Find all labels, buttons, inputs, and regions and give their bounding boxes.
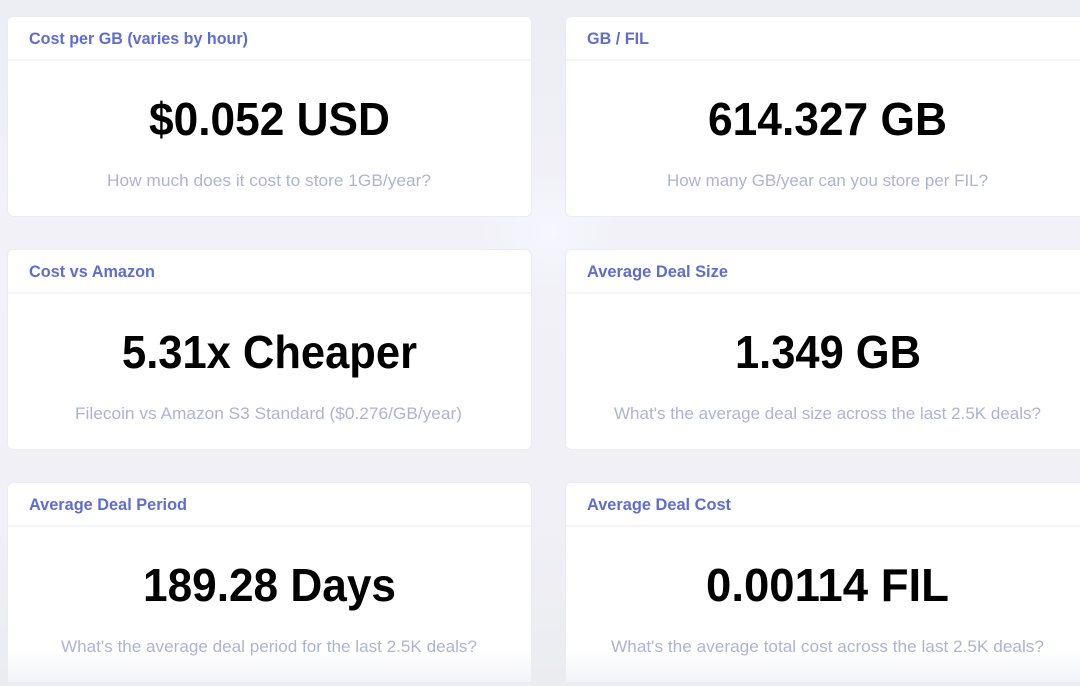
value: average deal period: 189.28 Days — [143, 559, 396, 611]
panel: average deal cost — [566, 482, 1080, 682]
heading: cost per GB: Cost per GB (varies by hour) — [29, 30, 248, 48]
value: cost per GB: $0.052 USD — [149, 93, 390, 145]
value: average deal size: 1.349 GB — [735, 326, 921, 378]
panel: cost per GB — [8, 16, 532, 216]
heading: average deal cost: Average Deal Cost — [587, 496, 731, 514]
heading: average deal size: Average Deal Size — [587, 263, 728, 281]
heading: GB per FIL: GB / FIL — [587, 30, 649, 48]
description: cost per GB: How much does it cost to store 1GB/year? — [107, 172, 431, 190]
heading: average deal period: Average Deal Period — [29, 496, 187, 514]
panel: average deal period — [8, 482, 532, 682]
description: average deal size: What's the average deal size across the last 2.5K deals? — [614, 405, 1041, 423]
panel: average deal size — [566, 250, 1080, 450]
description: average deal cost: What's the average total cost across the last 2.5K deals? — [611, 638, 1044, 656]
description: cost vs Amazon: Filecoin vs Amazon S3 Standard ($0.276/GB/year) — [75, 405, 462, 423]
value: cost vs Amazon: 5.31x Cheaper — [122, 326, 417, 378]
heading: cost vs Amazon: Cost vs Amazon — [29, 263, 155, 281]
value: average deal cost: 0.00114 FIL — [706, 559, 949, 611]
value: GB per FIL: 614.327 GB — [708, 93, 947, 145]
panel: GB per FIL — [566, 16, 1080, 216]
description: average deal period: What's the average deal period for the last 2.5K deals? — [61, 638, 477, 656]
description: GB per FIL: How many GB/year can you store per FIL? — [667, 172, 988, 190]
panel: cost vs Amazon — [8, 250, 532, 450]
